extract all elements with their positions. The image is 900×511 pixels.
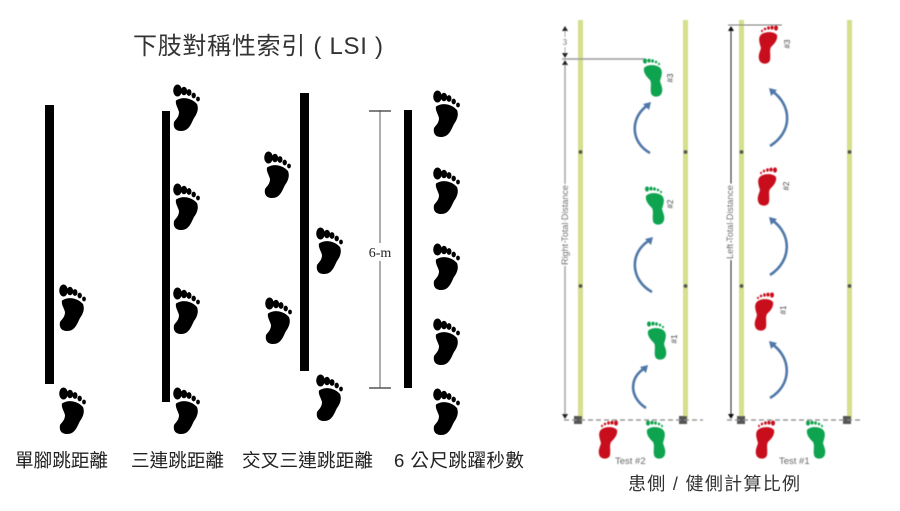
icon: foot 4 bbox=[433, 318, 460, 365]
icon: red foot start bbox=[756, 420, 775, 459]
label: test 2: Test #2 bbox=[615, 456, 646, 467]
label: #3: #3 bbox=[783, 39, 792, 48]
icon: foot 3 bbox=[433, 244, 460, 290]
title: 下肢對稱性索引 ( LSI ) bbox=[133, 33, 383, 60]
measure line: right total distance bbox=[561, 26, 645, 419]
icon: foot 5 bbox=[433, 388, 460, 435]
bar: timed hop line bbox=[404, 110, 412, 388]
arrow: hop 3 bbox=[769, 88, 787, 146]
icon: foot 2 bbox=[433, 168, 460, 214]
icon: red foot start bbox=[599, 420, 618, 459]
measure line: right total distance: 3 bbox=[563, 38, 568, 47]
icon: red foot #3 bbox=[759, 25, 778, 64]
label: #1: #1 bbox=[670, 334, 679, 343]
lane posts bbox=[737, 20, 852, 424]
arrow: hop 1 bbox=[633, 365, 648, 408]
measure line: left total distance bbox=[728, 25, 782, 419]
label: triple hop: 三連跳距離 bbox=[131, 450, 224, 471]
icon: foot 1 bbox=[173, 84, 200, 131]
icon: foot 2 bbox=[59, 388, 86, 434]
icon: red foot #2 bbox=[758, 167, 777, 206]
arrow: hop 3 bbox=[635, 102, 651, 153]
bar: crossover line bbox=[300, 93, 309, 371]
label: crossover hop: 交叉三連跳距離 bbox=[242, 450, 373, 471]
panel: 6-metre timed hop bbox=[367, 90, 524, 471]
arrow: hop 2 bbox=[635, 237, 653, 292]
start line bbox=[727, 419, 863, 421]
label: test 1: Test #1 bbox=[779, 456, 810, 467]
icon: red foot #1 bbox=[755, 292, 774, 331]
panel: left-leg test diagram bbox=[725, 20, 863, 467]
icon: foot 4 bbox=[316, 374, 343, 421]
icon: foot 1 bbox=[59, 284, 86, 331]
icon: green foot start bbox=[646, 420, 665, 459]
icon: foot 3 bbox=[173, 288, 200, 334]
icon: foot 1 bbox=[264, 152, 291, 198]
caption: affected / healthy ratio: 患側 / 健側計算比例 bbox=[628, 474, 800, 494]
panel: triple hop distance bbox=[131, 84, 224, 471]
bracket: 6-m dimension: 6-m bbox=[369, 246, 391, 261]
panel: single-leg hop distance bbox=[15, 105, 108, 471]
arrow: hop 2 bbox=[769, 217, 787, 275]
icon: green foot #3 bbox=[643, 58, 662, 97]
panel: crossover triple hop distance bbox=[242, 93, 373, 471]
arrow: hop 1 bbox=[769, 341, 787, 398]
icon: foot 4 bbox=[173, 388, 200, 434]
bar: triple hop line bbox=[162, 111, 170, 402]
icon: green foot #1 bbox=[647, 321, 666, 360]
label: #2: #2 bbox=[666, 199, 675, 208]
label: single hop: 單腳跳距離 bbox=[15, 450, 108, 471]
icon: green foot start bbox=[806, 420, 825, 459]
lane posts bbox=[574, 20, 688, 424]
label: timed hop: 6 公尺跳躍秒數 bbox=[394, 450, 524, 471]
icon: foot 2 bbox=[316, 228, 343, 274]
label: right total distance: Right Total Distance bbox=[560, 185, 570, 265]
label: #2: #2 bbox=[782, 181, 791, 190]
label: #1: #1 bbox=[779, 305, 788, 314]
label: left total distance: Left Total Distance bbox=[725, 185, 735, 259]
icon: foot 2 bbox=[173, 184, 200, 230]
label: #3: #3 bbox=[666, 73, 675, 82]
start line bbox=[564, 419, 703, 421]
bracket: 6-m dimension bbox=[367, 110, 393, 388]
bar: single hop line bbox=[45, 105, 54, 384]
panel: right-leg test diagram bbox=[560, 20, 703, 467]
icon: foot 3 bbox=[265, 298, 292, 344]
icon: foot 1 bbox=[433, 90, 460, 137]
icon: green foot #2 bbox=[645, 186, 664, 225]
